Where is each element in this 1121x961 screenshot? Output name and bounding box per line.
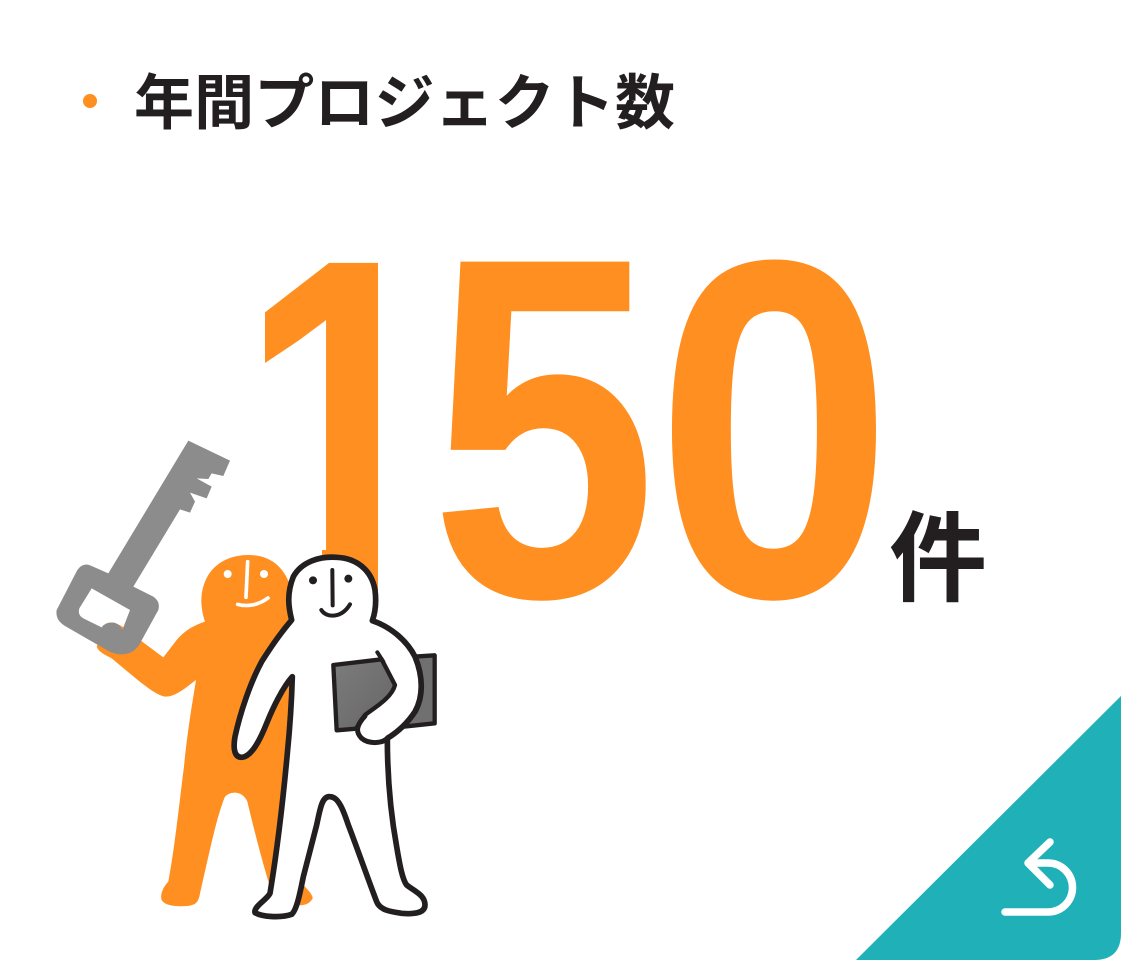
title: 年間プロジェクト数	[134, 70, 675, 137]
big number 150: 0	[655, 160, 894, 698]
arm details	[358, 716, 387, 743]
white figure	[234, 557, 425, 917]
orange figure face	[224, 562, 268, 606]
unit: 件	[889, 504, 987, 614]
icon: key	[56, 441, 230, 654]
white figure face	[309, 570, 352, 616]
bullet dot	[83, 94, 97, 108]
big number 150	[230, 156, 894, 704]
big number 150: 1	[230, 156, 459, 704]
illustration: two figures with key and book	[56, 441, 435, 917]
orange figure	[97, 555, 313, 906]
icon: return arrow	[1005, 842, 1072, 912]
big number 150: 5	[430, 157, 657, 700]
book front and arm	[333, 659, 395, 730]
book back	[403, 655, 435, 727]
corner triangle	[856, 696, 1121, 960]
